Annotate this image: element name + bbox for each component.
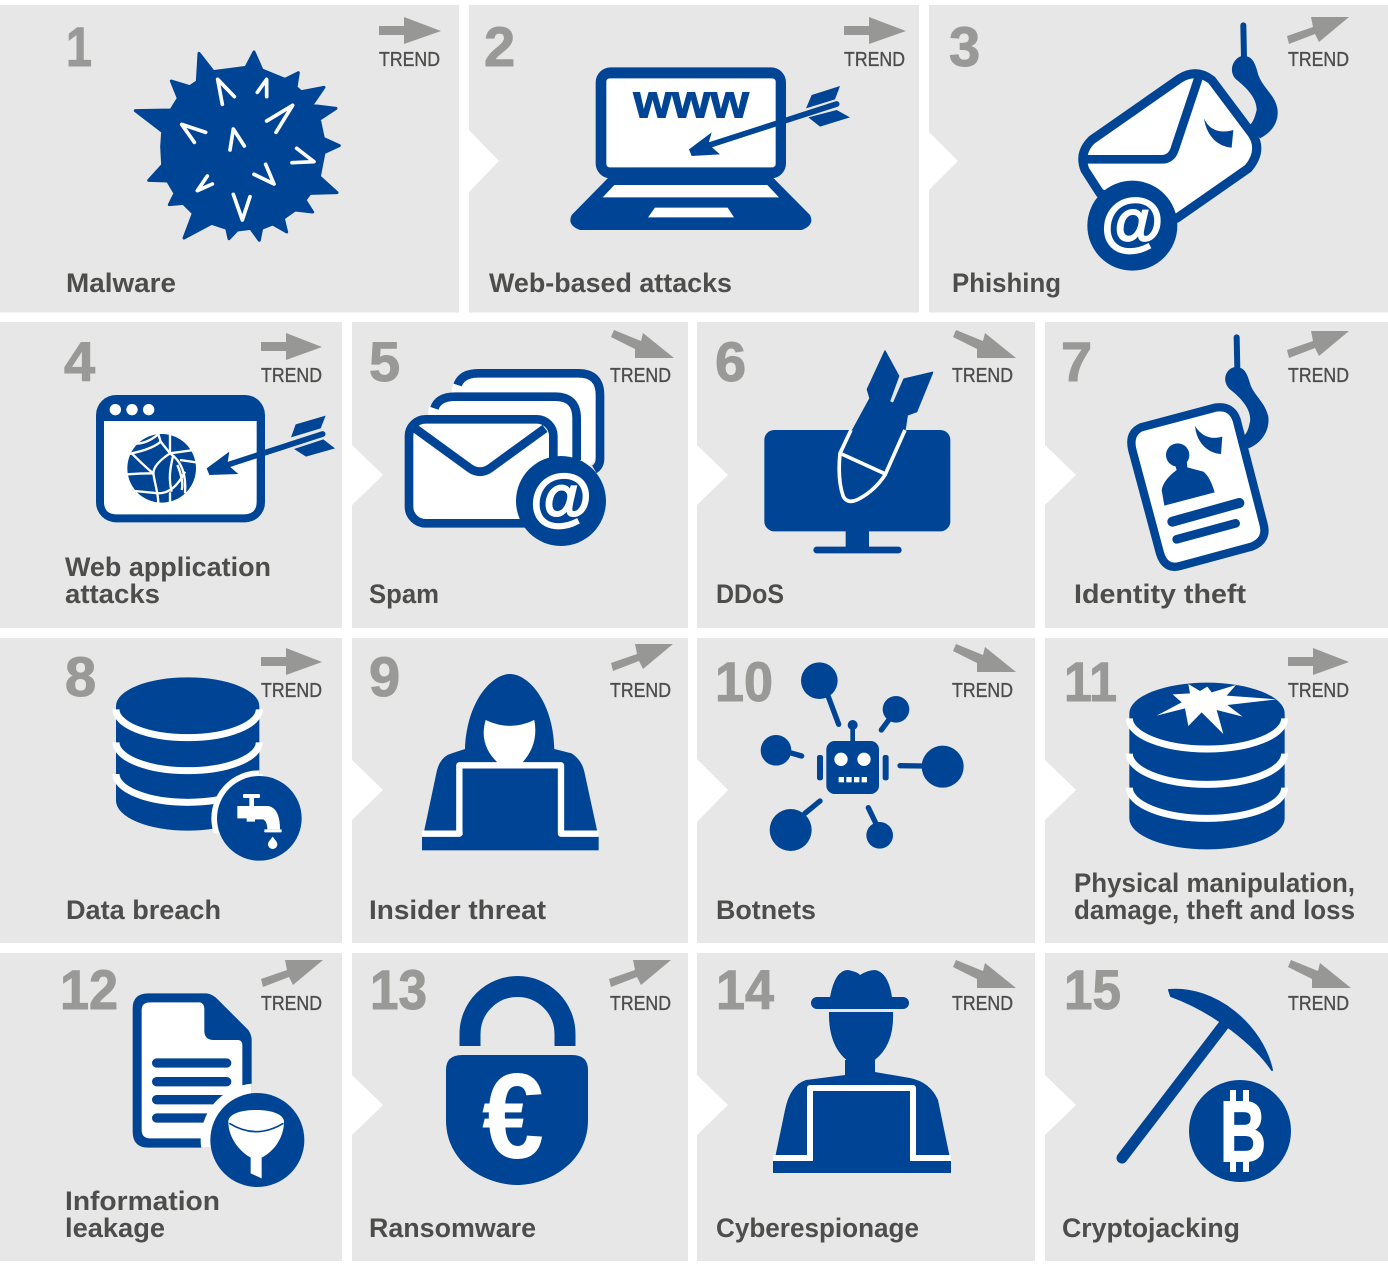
trend arrow: down-right [953,960,1016,988]
trend label: TREND [1288,993,1349,1015]
label [1074,868,1355,925]
label: Ransomware [369,1213,536,1243]
number 5: 5 [369,330,400,393]
label: attacks [65,579,160,609]
trend label: TREND [261,365,322,387]
icon: padlock with euro [446,986,588,1185]
label: Cyberespionage [716,1213,919,1243]
trend arrow: down-right [953,644,1016,672]
panel: 14 Cyberespionage [697,953,1035,1261]
icon: monitor with rocket [764,351,950,553]
label: Phishing [952,268,1061,298]
trend label: TREND [1288,680,1349,702]
label: DDoS [716,579,784,609]
number 1: 1 [66,15,92,78]
icon: laptop with arrow [570,67,850,230]
trend arrow: right [261,648,322,675]
icon: stacked envelopes with at sign [409,373,606,546]
number 12: 12 [60,958,118,1021]
label [65,1186,220,1243]
label: Identity theft [1074,579,1246,609]
icon: laptop with arrow: www [632,74,749,127]
icon: damaged database [1129,683,1285,849]
trend label: TREND [379,49,440,71]
number 9: 9 [369,645,400,708]
icon: ID card on hook [1131,337,1269,567]
number 14: 14 [716,958,774,1021]
number 13: 13 [370,958,427,1021]
label: Web-based attacks [489,268,732,298]
trend arrow: up-right [261,960,323,987]
label: Botnets [716,895,816,925]
number 2: 2 [484,15,515,78]
label: damage, theft and loss [1074,895,1355,925]
trend label: TREND [952,680,1013,702]
panel: 4 Web application attacks [0,322,342,628]
icon: padlock with euro: € [482,1048,544,1184]
trend arrow: right [379,17,441,44]
panel: 10 Botnets [697,638,1035,943]
icon: database with dripping tap [116,677,307,866]
icon: stacked envelopes with at sign: @ [530,463,592,533]
icon: phishing envelope on hook [1083,25,1278,271]
number 11: 11 [1064,650,1117,713]
trend arrow: down-right [1288,960,1351,988]
label: leakage [65,1213,165,1243]
trend label: TREND [610,993,671,1015]
trend arrow: up-right [609,960,671,987]
trend arrow: down-right [611,330,674,358]
icon: phishing envelope on hook: @ [1101,185,1164,257]
label: Spam [369,579,439,609]
trend label: TREND [610,680,671,702]
number 4: 4 [64,330,95,393]
trend label: TREND [261,993,322,1015]
panel: 15 Cryptojacking [1045,953,1388,1261]
trend arrow: down-right [953,330,1016,358]
number 6: 6 [715,330,746,393]
panel: 6 DDoS [697,322,1035,628]
panel: 9 Insider threat [352,638,688,943]
trend arrow: up-right [1287,331,1349,358]
label: Cryptojacking [1062,1213,1240,1243]
trend label: TREND [610,365,671,387]
number 8: 8 [65,645,96,708]
icon: robot and network nodes [761,662,964,851]
panel: 13 Ransomware [352,953,688,1261]
panel: 3 Phishing [929,5,1388,312]
panel: 8 Data breach [0,638,342,943]
label: Malware [66,268,176,298]
number 10: 10 [715,650,773,713]
panel: 1 Malware [0,5,459,312]
label: Insider threat [369,895,546,925]
trend label: TREND [844,49,905,71]
trend arrow: up-right [611,644,673,671]
icon: document with funnel [133,993,314,1197]
icon: pickaxe and bitcoin [1122,990,1291,1182]
trend label: TREND [952,365,1013,387]
trend arrow: right [261,333,322,360]
trend label: TREND [261,680,322,702]
panel: 11 Physical manipulation [1045,638,1388,943]
number 7: 7 [1061,330,1092,393]
trend label: TREND [1288,49,1349,71]
icon: hooded insider at laptop [422,674,599,850]
trend arrow: up-right [1287,17,1349,44]
trend arrow: right [844,17,906,44]
trend label: TREND [1288,365,1349,387]
icon: pickaxe and bitcoin: B [1220,1085,1266,1180]
panel: 7 Identity theft [1045,322,1388,628]
icon: virus [135,52,339,240]
number 3: 3 [949,15,980,78]
panel: 12 Information leakage [0,953,342,1261]
panel: 2 Web-based attacks [469,5,919,312]
label: Physical manipulation, [1074,868,1355,898]
trend label: TREND [952,993,1013,1015]
number 15: 15 [1064,958,1121,1021]
label: Information [65,1186,220,1216]
icon: spy in hat at laptop [773,970,951,1173]
trend arrow: right [1288,648,1349,675]
icon: browser window with arrow [96,395,335,522]
panel: 5 Spam [352,322,688,628]
label [65,552,271,609]
label: Data breach [66,895,221,925]
label: Web application [65,552,271,582]
